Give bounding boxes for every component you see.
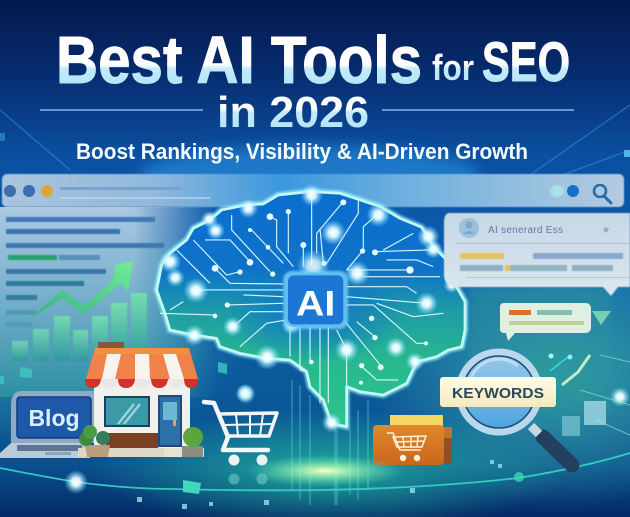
- Blog label: Blog: [28, 405, 80, 431]
- vertical light streams: [292, 380, 368, 505]
- circuit traces: [160, 195, 443, 403]
- glowing points: [159, 184, 460, 433]
- laptop with Blog screen: [0, 391, 95, 458]
- bar chart: [12, 293, 147, 361]
- keywords tag: KEYWORDS: [452, 385, 544, 402]
- window dots: [4, 185, 53, 197]
- shop door: [159, 396, 181, 446]
- AI chip: [283, 271, 348, 329]
- browser window: top bar: [2, 174, 624, 207]
- circuit nodes: [212, 199, 428, 385]
- cart icon on box: [387, 433, 426, 460]
- result heading: AI senerard Ess: [488, 225, 563, 236]
- subtitle year with rules: in 2026: [217, 88, 369, 137]
- right search result card: [444, 213, 630, 296]
- bottom light wave: [0, 362, 630, 509]
- handle: [531, 426, 572, 465]
- avatar: [459, 218, 479, 238]
- shop window: [105, 397, 149, 426]
- lens: [459, 352, 539, 432]
- AI label: AI: [296, 284, 335, 323]
- title: for: [432, 47, 474, 88]
- search icon and status dot: [550, 185, 611, 203]
- right search result card: ★: [602, 225, 611, 236]
- growth arrow: [28, 261, 133, 320]
- title: Best AI Tools: [56, 23, 422, 98]
- right speech bubble: [500, 303, 611, 341]
- storefront: [78, 342, 204, 457]
- tagline: Boost Rankings, Visibility & AI-Driven Growth: [76, 139, 528, 164]
- shopping cart, white: [204, 402, 277, 484]
- orange box with cart: [373, 415, 452, 465]
- title: SEO: [482, 30, 570, 93]
- left browser page with text lines: [0, 207, 215, 397]
- magnifying glass with keywords: [440, 352, 572, 465]
- plant left: [79, 425, 110, 457]
- small mini chart panel: [530, 346, 630, 436]
- plant right: [182, 427, 203, 457]
- brain with circuits: [157, 184, 465, 433]
